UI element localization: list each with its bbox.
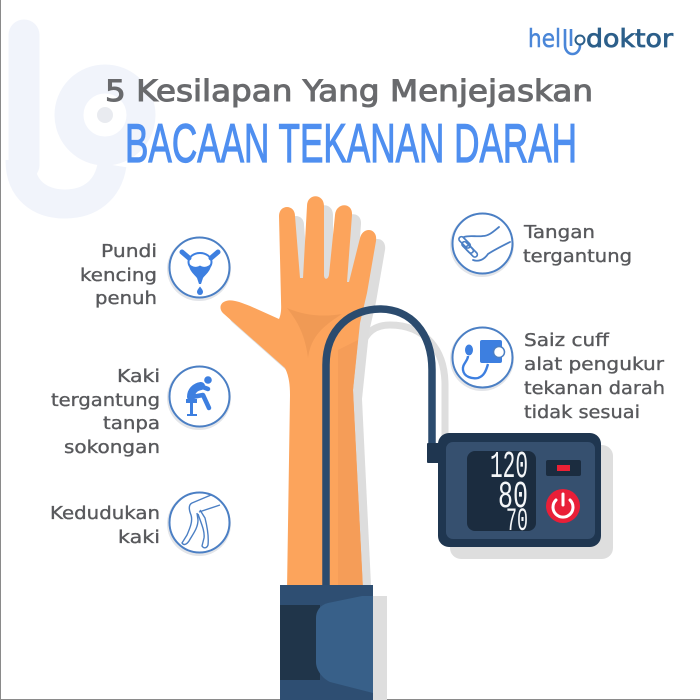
icon: seated person — [167, 366, 231, 430]
palm crease — [287, 308, 342, 358]
indicator light — [546, 460, 581, 476]
label: hanging arm: tergantung — [523, 246, 632, 267]
label: unsupported feet: sokongan — [64, 437, 160, 458]
label: cuff size — [524, 330, 665, 423]
icon: bladder — [167, 237, 231, 301]
icon: legs — [167, 492, 231, 556]
label: leg position: Kedudukan — [50, 503, 160, 524]
label: leg position: kaki — [118, 527, 160, 548]
label: leg position — [50, 503, 160, 548]
cuff tube — [326, 309, 432, 590]
label: unsupported feet — [51, 366, 160, 458]
watermark logo — [20, 35, 141, 204]
label: cuff size: alat pengukur — [524, 354, 665, 375]
power button — [546, 489, 580, 523]
label: cuff size: Saiz cuff — [524, 330, 610, 351]
label: unsupported feet: Kaki — [117, 366, 160, 387]
logo: hellodoktor: doktor — [586, 24, 674, 53]
monitor screen — [467, 446, 536, 540]
monitor screen: 70 — [506, 503, 528, 540]
logo: hellodoktor — [528, 24, 674, 54]
icon: hanging arm — [450, 213, 514, 277]
label: bladder: kencing — [80, 265, 157, 286]
title line 1: 5 Kesilapan Yang Menjejaskan — [105, 74, 593, 108]
label: bladder — [80, 241, 157, 309]
label: cuff size: tidak sesuai — [524, 402, 640, 423]
forearm shading — [338, 340, 363, 590]
monitor screen: 120 — [490, 446, 528, 489]
label: bladder: penuh — [95, 288, 157, 309]
label: bladder: Pundi — [101, 241, 157, 262]
blood pressure cuff — [280, 585, 387, 700]
blood pressure monitor — [427, 433, 613, 559]
label: hanging arm — [523, 222, 632, 267]
icon: cuff device — [450, 327, 514, 391]
label: cuff size: tekanan darah — [524, 378, 665, 399]
label: unsupported feet: tergantung — [51, 390, 160, 411]
arm and hand — [220, 196, 445, 594]
monitor screen: 80 — [498, 476, 528, 519]
label: hanging arm: Tangan — [523, 222, 595, 243]
logo: hellodoktor: hel — [528, 24, 561, 53]
label: unsupported feet: tanpa — [103, 413, 160, 434]
